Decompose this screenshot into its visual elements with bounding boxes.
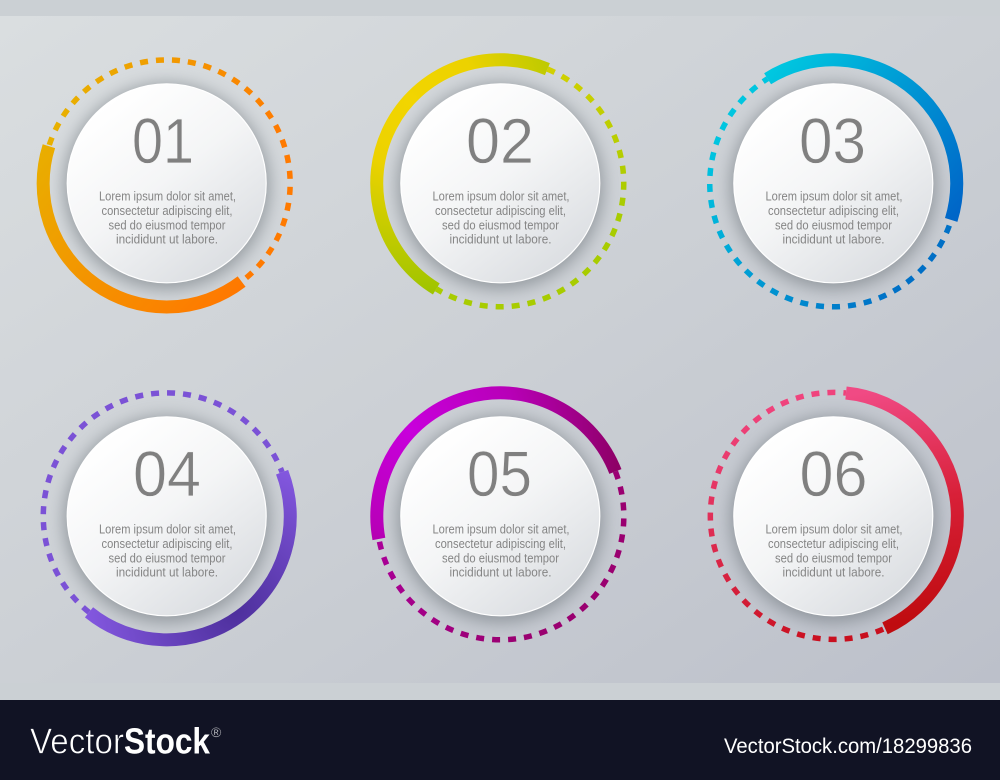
panel: step 02 bbox=[377, 60, 624, 307]
number 03: 03 bbox=[799, 105, 866, 177]
text 06: Lorem ipsum dolor sit amet, bbox=[766, 523, 902, 537]
text 03: Lorem ipsum dolor sit amet, bbox=[766, 190, 902, 204]
footer image id: VectorStock.com/18299836 bbox=[724, 735, 972, 758]
text 06: consectetur adipiscing elit, bbox=[768, 537, 899, 551]
disc 01 bbox=[67, 84, 266, 283]
text 06 bbox=[766, 523, 902, 579]
text 02: consectetur adipiscing elit, bbox=[435, 204, 566, 218]
solid arc 02 bbox=[377, 60, 547, 289]
text 03 bbox=[766, 190, 902, 246]
text 04: consectetur adipiscing elit, bbox=[102, 537, 232, 551]
text 05 bbox=[432, 523, 570, 579]
solid arc 05 bbox=[377, 393, 615, 539]
text 05: Lorem ipsum dolor sit amet, bbox=[432, 523, 570, 537]
dashed arc 05 bbox=[379, 472, 624, 640]
disc 04 bbox=[67, 417, 266, 616]
footer logo: Stock bbox=[124, 720, 211, 761]
number 06: 06 bbox=[800, 438, 868, 510]
text 01: consectetur adipiscing elit, bbox=[102, 204, 232, 218]
text 03: consectetur adipiscing elit, bbox=[768, 204, 899, 218]
text 05: consectetur adipiscing elit, bbox=[435, 537, 566, 551]
solid arc 04 bbox=[89, 472, 290, 640]
text 05: sed do eiusmod tempor bbox=[442, 551, 559, 565]
number 05: 05 bbox=[467, 438, 532, 510]
dashed arc 02 bbox=[436, 69, 624, 307]
panel: step 03 bbox=[710, 60, 957, 307]
disc 02 bbox=[401, 84, 600, 283]
text 03: sed do eiusmod tempor bbox=[775, 218, 892, 232]
text 06: incididunt ut labore. bbox=[782, 565, 884, 579]
number 01: 01 bbox=[132, 105, 194, 177]
panel: step 04 bbox=[43, 393, 290, 640]
solid arc 03 bbox=[768, 60, 957, 220]
text 02: sed do eiusmod tempor bbox=[442, 218, 559, 232]
footer bar bbox=[0, 700, 1000, 780]
text 05: incididunt ut labore. bbox=[450, 565, 552, 579]
panel: step 01 bbox=[43, 60, 290, 307]
disc 06 bbox=[734, 417, 933, 616]
text 04: sed do eiusmod tempor bbox=[108, 551, 226, 565]
panel: step 05 bbox=[377, 393, 624, 640]
footer logo: Vector bbox=[30, 720, 124, 761]
text 01: Lorem ipsum dolor sit amet, bbox=[99, 190, 236, 204]
text 01: sed do eiusmod tempor bbox=[108, 218, 226, 232]
disc 03 bbox=[734, 84, 933, 283]
text 03: incididunt ut labore. bbox=[782, 232, 884, 246]
solid arc 01 bbox=[43, 146, 242, 307]
disc 05 bbox=[401, 417, 600, 616]
text 02: incididunt ut labore. bbox=[450, 232, 552, 246]
dashed arc 06 bbox=[710, 392, 885, 639]
text 02 bbox=[432, 190, 570, 246]
text 04: incididunt ut labore. bbox=[116, 565, 218, 579]
text 04 bbox=[99, 523, 236, 579]
text 02: Lorem ipsum dolor sit amet, bbox=[432, 190, 570, 204]
solid arc 06 bbox=[846, 393, 957, 628]
number 02: 02 bbox=[466, 105, 534, 177]
dashed arc 04 bbox=[43, 393, 282, 612]
dashed arc 01 bbox=[49, 60, 290, 282]
footer logo: ® bbox=[211, 724, 222, 740]
panel: step 06 bbox=[710, 392, 957, 639]
text 06: sed do eiusmod tempor bbox=[775, 551, 892, 565]
footer logo bbox=[30, 720, 222, 761]
number 04: 04 bbox=[133, 438, 201, 510]
text 01 bbox=[99, 190, 236, 246]
dashed arc 03 bbox=[710, 79, 951, 307]
text 01: incididunt ut labore. bbox=[116, 232, 218, 246]
text 04: Lorem ipsum dolor sit amet, bbox=[99, 523, 236, 537]
